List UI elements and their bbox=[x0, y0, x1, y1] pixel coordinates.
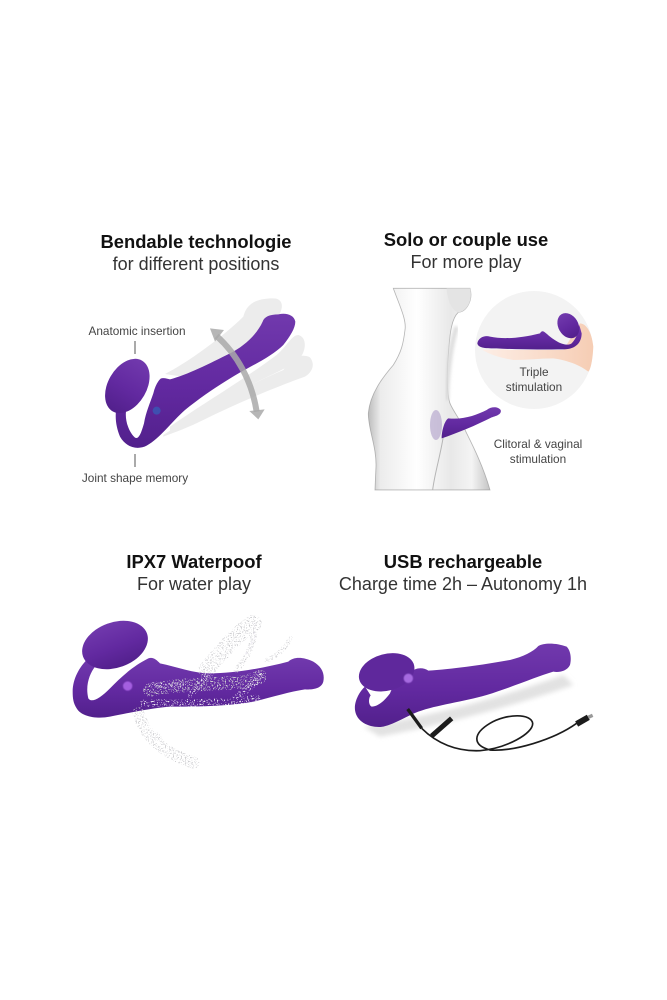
product illustration: waterproof bbox=[73, 612, 324, 718]
product illustration: usb bbox=[355, 644, 593, 751]
heading: bendable: Bendable technologie bbox=[100, 231, 292, 252]
figure: torso shading bbox=[447, 327, 457, 400]
purple shaft bbox=[73, 658, 324, 718]
figure: body silhouette bbox=[368, 288, 490, 490]
subheading: positions: for different positions bbox=[113, 254, 279, 274]
subheading: water play: For water play bbox=[137, 574, 251, 594]
usb cable bbox=[408, 709, 593, 751]
label: stimulation: stimulation bbox=[510, 452, 566, 466]
product worn, ghosted base bbox=[430, 410, 442, 440]
bulb bbox=[355, 647, 419, 697]
water splash on white bbox=[138, 620, 291, 763]
bulb bbox=[96, 351, 159, 421]
icon: hand bbox=[482, 323, 593, 372]
heading: solo or couple: Solo or couple use bbox=[384, 229, 548, 250]
label: triple stimulation line two: stimulation bbox=[506, 380, 562, 394]
product in hand bbox=[477, 309, 584, 349]
panel: solo or couple use bbox=[368, 229, 593, 490]
indicator light bbox=[123, 681, 132, 691]
purple shaft bbox=[355, 644, 571, 727]
leader line: joint bbox=[134, 454, 136, 467]
label: clitoral and vaginal: Clitoral & vaginal bbox=[494, 437, 582, 451]
panel: bendable technology bbox=[82, 231, 313, 485]
panel: usb rechargeable bbox=[339, 551, 593, 751]
bulb bbox=[75, 612, 155, 678]
circle inset bbox=[475, 291, 593, 409]
purple shaft bbox=[116, 314, 295, 448]
heading: usb: USB rechargeable bbox=[384, 551, 542, 572]
label: joint shape memory: Joint shape memory bbox=[82, 471, 188, 485]
figure and inset illustration bbox=[368, 288, 593, 490]
heading: waterproof: IPX7 Waterpoof bbox=[126, 551, 262, 572]
figure: inner leg shading bbox=[433, 423, 445, 490]
label: anatomic insertion: Anatomic insertion bbox=[88, 324, 186, 338]
subheading: charge time: Charge time 2h – Autonomy 1h bbox=[339, 574, 587, 594]
product illustration: bending shaft bbox=[96, 298, 313, 448]
panel: waterproof bbox=[73, 551, 324, 763]
water splash over shaft bbox=[143, 620, 260, 703]
indicator light bbox=[153, 407, 161, 415]
label: triple stimulation: Triple bbox=[519, 365, 549, 379]
arrow: bend direction bbox=[210, 328, 265, 419]
ghost positions of bending shaft bbox=[163, 298, 313, 437]
leader line: anatomic insertion bbox=[134, 341, 136, 354]
product worn, shaft bbox=[442, 407, 501, 438]
figure: breast shading bbox=[447, 288, 471, 312]
subheading: more play: For more play bbox=[410, 252, 522, 272]
soft shadow under product bbox=[363, 675, 573, 737]
indicator light bbox=[404, 674, 413, 683]
